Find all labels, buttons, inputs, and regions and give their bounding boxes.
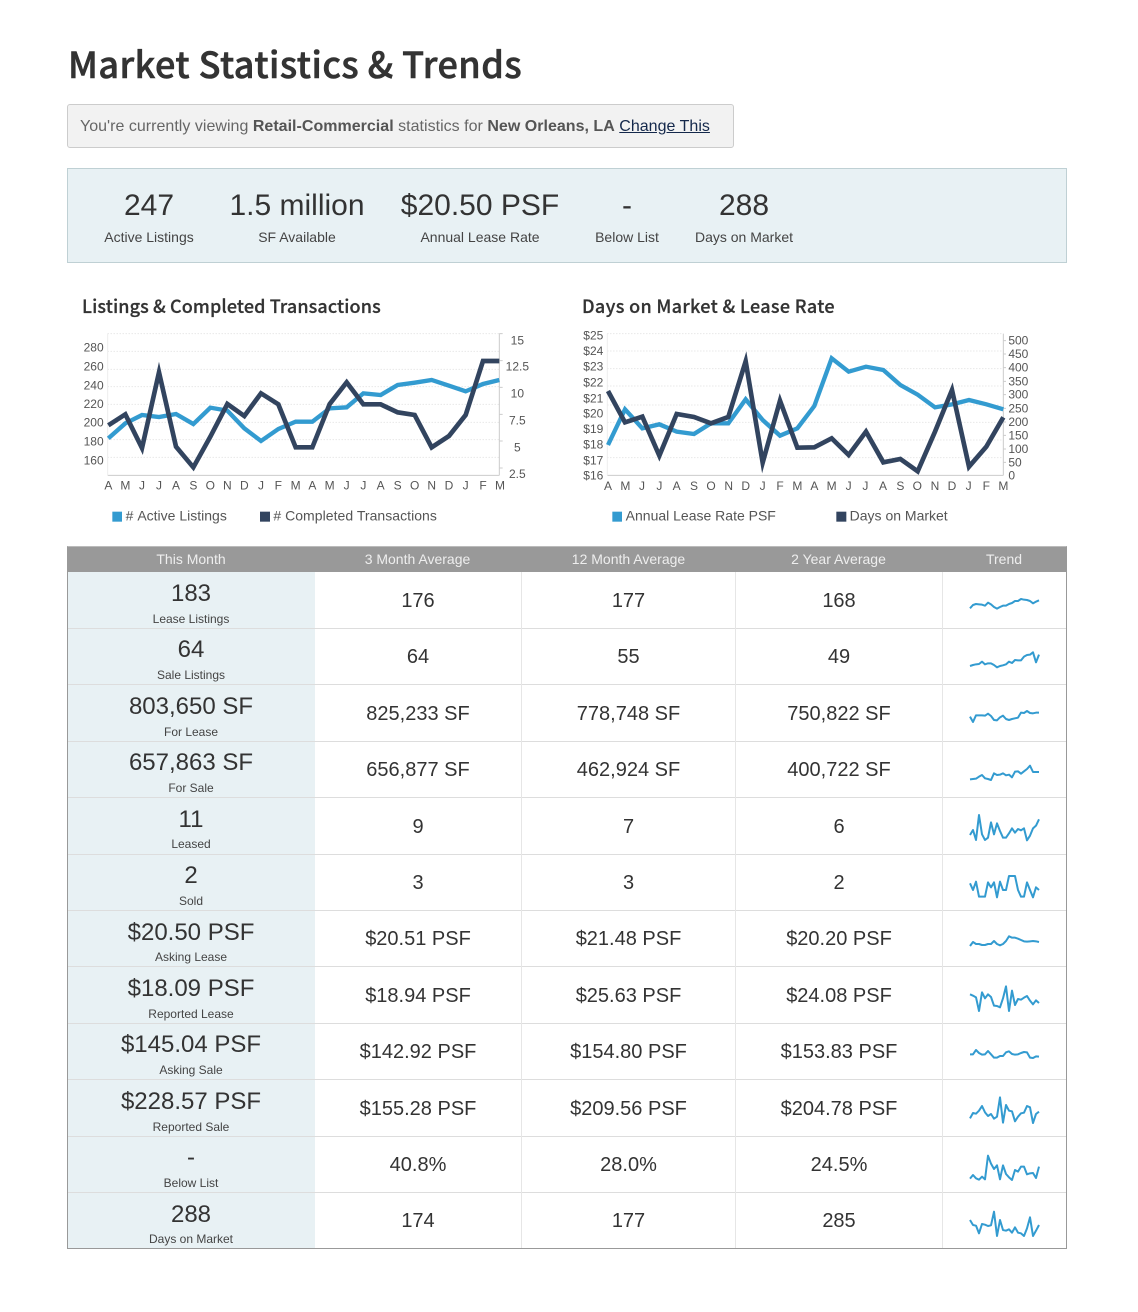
- row: asking sale: $153.83 PSF: [781, 1041, 897, 1063]
- month labels: J: [966, 479, 972, 493]
- row: reported lease: [68, 967, 1066, 1024]
- row: reported lease: $25.63 PSF: [576, 985, 681, 1007]
- sparkline: sold: [970, 876, 1039, 897]
- right axis labels: 450: [1008, 347, 1029, 361]
- row: asking lease: $20.51 PSF: [365, 928, 471, 950]
- stat: days on market: Days on Market: [695, 229, 793, 245]
- sparkline: for lease: [970, 711, 1039, 722]
- row: asking lease: [68, 911, 1066, 967]
- sparkline: below list: [970, 1156, 1039, 1180]
- row: asking lease: Asking Lease: [155, 950, 227, 964]
- left axis labels: 220: [84, 397, 104, 411]
- row: for sale: 656,877 SF: [366, 759, 470, 781]
- row: lease listings: [68, 572, 1066, 629]
- heading: listings chart: Listings & Completed Transactions: [82, 293, 381, 319]
- right axis labels: 400: [1008, 361, 1029, 375]
- row: reported lease: Reported Lease: [148, 1007, 234, 1021]
- row: for sale: 400,722 SF: [787, 759, 891, 781]
- row: asking lease: $20.20 PSF: [786, 928, 892, 950]
- panel: summary statistics band: [67, 168, 1067, 263]
- row: below list: 28.0%: [600, 1154, 657, 1176]
- month labels: A: [604, 479, 612, 493]
- left axis labels: $16: [583, 469, 604, 483]
- row: below list: 24.5%: [811, 1154, 867, 1176]
- row: asking sale: [68, 1024, 1066, 1080]
- row: for sale: 462,924 SF: [577, 759, 680, 781]
- month labels: O: [706, 479, 716, 493]
- month labels: D: [445, 478, 454, 492]
- stat: annual lease rate: [401, 189, 559, 245]
- notice bar: current selection: [67, 104, 734, 148]
- month labels: D: [240, 478, 249, 492]
- month labels: A: [308, 478, 316, 492]
- row: days on market: 285: [822, 1210, 856, 1232]
- row: asking sale: $145.04 PSF: [121, 1031, 261, 1058]
- left axis labels: $17: [583, 453, 604, 467]
- month labels: M: [998, 479, 1008, 493]
- left axis labels: [583, 329, 604, 483]
- row: days on market: 177: [612, 1210, 645, 1232]
- right axis labels: 200: [1008, 415, 1029, 429]
- month labels: A: [810, 479, 818, 493]
- row: sold: 2: [833, 872, 845, 894]
- month labels: N: [931, 479, 939, 493]
- left axis labels: $23: [583, 360, 604, 374]
- month labels: O: [913, 479, 922, 493]
- month labels: M: [325, 478, 335, 492]
- legend: completed transactions: # Completed Transactions: [273, 508, 437, 524]
- sparkline: asking lease: [970, 936, 1039, 946]
- row: reported sale: $155.28 PSF: [360, 1098, 476, 1120]
- stat: days on market: 288: [719, 189, 769, 222]
- row: days on market: Days on Market: [149, 1232, 233, 1246]
- row: leased: 11: [179, 806, 203, 833]
- row: sold: [68, 855, 1066, 911]
- row: lease listings: 183: [171, 580, 211, 607]
- row: sale listings: Sale Listings: [157, 668, 225, 682]
- stat: SF available: 1.5 million: [229, 189, 365, 222]
- row: reported lease: $18.09 PSF: [128, 975, 254, 1002]
- month labels: J: [360, 478, 366, 492]
- line chart: days on market and lease rate: [583, 329, 1029, 524]
- row: for lease: 778,748 SF: [577, 703, 680, 725]
- month labels: A: [104, 478, 112, 492]
- row: below list: -: [187, 1144, 195, 1171]
- month labels: A: [879, 479, 887, 493]
- month labels: M: [620, 479, 630, 493]
- sparkline: lease listings: [970, 599, 1039, 609]
- right axis labels: 15: [511, 333, 524, 347]
- row: leased: 6: [833, 816, 845, 838]
- table header: Trend: [986, 551, 1022, 567]
- row: lease listings: Lease Listings: [153, 612, 229, 626]
- left axis labels: 200: [84, 416, 104, 430]
- month labels: N: [223, 478, 232, 492]
- stat: SF available: SF Available: [258, 229, 336, 245]
- left axis labels: 280: [84, 341, 104, 355]
- month labels: A: [673, 479, 681, 493]
- row: for lease: 825,233 SF: [366, 703, 470, 725]
- row: sale listings: 64: [178, 636, 204, 663]
- sparkline: sale listings: [970, 652, 1039, 667]
- row: below list: Below List: [164, 1176, 218, 1190]
- title: Market Statistics & Trends: [68, 37, 522, 89]
- series: annual lease rate: [608, 358, 1003, 445]
- row: asking lease: $20.50 PSF: [128, 919, 254, 946]
- sparkline: reported sale: [970, 1097, 1039, 1123]
- left axis labels: 260: [84, 359, 104, 373]
- row: days on market: 288: [171, 1201, 211, 1228]
- month labels: S: [394, 478, 402, 492]
- sparkline: reported lease: [970, 986, 1039, 1011]
- right axis labels: 100: [1008, 442, 1029, 456]
- month labels: J: [639, 479, 645, 493]
- row: reported lease: $24.08 PSF: [786, 985, 892, 1007]
- row: sold: 2: [184, 862, 198, 889]
- row: reported sale: $209.56 PSF: [570, 1098, 687, 1120]
- right axis labels: 500: [1008, 334, 1029, 348]
- left axis labels: $20: [583, 406, 604, 420]
- data table: [67, 546, 1067, 1249]
- right axis labels: 7.5: [509, 413, 526, 427]
- month labels: F: [983, 479, 990, 493]
- right axis labels: 10: [511, 387, 524, 401]
- stat: active listings: 247: [124, 189, 174, 222]
- table header: [68, 547, 1066, 572]
- right axis labels: 5: [514, 440, 521, 454]
- right axis labels: 300: [1008, 388, 1029, 402]
- month labels: M: [120, 478, 130, 492]
- month labels: J: [760, 479, 766, 493]
- month labels: D: [948, 479, 957, 493]
- series: active listings: [108, 380, 499, 441]
- table header: 12 Month Average: [572, 551, 685, 567]
- month labels: O: [206, 478, 215, 492]
- left axis labels: $24: [583, 344, 604, 358]
- stat: below list: Below List: [595, 229, 659, 245]
- stat: annual lease rate: $20.50 PSF: [401, 189, 559, 222]
- month labels: J: [156, 478, 162, 492]
- month labels: M: [495, 478, 505, 492]
- trend sparklines column: [969, 598, 1040, 1237]
- month labels: A: [172, 478, 180, 492]
- row: below list: [68, 1137, 1066, 1193]
- month labels: F: [479, 478, 487, 492]
- row: for lease: 803,650 SF: [129, 693, 253, 720]
- left axis labels: $21: [583, 391, 604, 405]
- row: reported sale: [68, 1080, 1066, 1137]
- month labels: J: [139, 478, 145, 492]
- left axis labels: [84, 341, 104, 467]
- left axis labels: 180: [84, 435, 104, 449]
- left axis labels: $18: [583, 437, 604, 451]
- month labels: S: [896, 479, 904, 493]
- series: days on market: [608, 361, 1003, 471]
- sparkline: asking sale: [970, 1050, 1039, 1058]
- stat: below list: [595, 189, 659, 245]
- month labels: F: [776, 479, 784, 493]
- row: for sale: [68, 742, 1066, 798]
- month labels: N: [724, 479, 733, 493]
- row: lease listings: 168: [822, 590, 856, 612]
- row: sold: 3: [623, 872, 634, 894]
- row: lease listings: 176: [401, 590, 435, 612]
- row: leased: [68, 798, 1066, 855]
- row: sale listings: 64: [407, 646, 429, 668]
- stat: annual lease rate: Annual Lease Rate: [420, 229, 540, 245]
- month labels: J: [846, 479, 852, 493]
- left axis labels: 160: [84, 453, 104, 467]
- row: reported sale: $228.57 PSF: [121, 1088, 261, 1115]
- series: completed transactions: [108, 361, 499, 467]
- stat: days on market: [695, 189, 793, 245]
- month labels: M: [291, 478, 301, 492]
- row: days on market: [68, 1193, 856, 1248]
- right axis labels: 350: [1008, 374, 1029, 388]
- row: reported sale: Reported Sale: [153, 1120, 229, 1134]
- right axis labels: 0: [1008, 469, 1015, 483]
- notice bar: current selection: You're currently viewing Retail-Commercial statistics for New Orleans, LA Change This: [80, 118, 710, 135]
- row: leased: 7: [623, 816, 634, 838]
- row: days on market: 174: [401, 1210, 435, 1232]
- left axis labels: $25: [583, 329, 604, 343]
- legend: active listings: # Active Listings: [126, 508, 227, 524]
- month labels: M: [827, 479, 837, 493]
- month labels: S: [189, 478, 197, 492]
- sparkline: days on market: [970, 1212, 1039, 1236]
- legend: annual lease rate: Annual Lease Rate PSF: [626, 508, 776, 524]
- month labels: O: [410, 478, 419, 492]
- right axis labels: 2.5: [509, 467, 526, 481]
- row: asking sale: Asking Sale: [159, 1063, 223, 1077]
- right axis labels: 12.5: [506, 360, 529, 374]
- row: sold: 3: [412, 872, 424, 894]
- row: leased: 9: [412, 816, 424, 838]
- table header: 2 Year Average: [791, 551, 886, 567]
- row: below list: 40.8%: [390, 1154, 446, 1176]
- left axis labels: 240: [84, 378, 104, 392]
- stat: active listings: [104, 189, 194, 245]
- month labels: A: [377, 478, 385, 492]
- right axis labels: [1008, 334, 1029, 483]
- left axis labels: $22: [583, 375, 604, 389]
- row: for sale: 657,863 SF: [129, 749, 253, 776]
- month labels: N: [427, 478, 436, 492]
- row: asking lease: $21.48 PSF: [576, 928, 681, 950]
- row: sale listings: 55: [617, 646, 640, 668]
- row: asking sale: $154.80 PSF: [570, 1041, 687, 1063]
- month labels: M: [792, 479, 802, 493]
- table header: 3 Month Average: [365, 551, 470, 567]
- month labels: S: [690, 479, 698, 493]
- month labels: J: [862, 479, 868, 493]
- heading: days on market chart: Days on Market & Lease Rate: [582, 293, 835, 319]
- month labels: J: [463, 478, 469, 492]
- month labels: D: [741, 479, 750, 493]
- month labels: J: [344, 478, 350, 492]
- stat: SF available: [229, 189, 365, 245]
- month labels: J: [656, 479, 662, 493]
- month labels: [104, 478, 505, 492]
- right axis labels: [506, 333, 529, 481]
- row: for lease: 750,822 SF: [787, 703, 891, 725]
- row: for lease: [68, 685, 1066, 742]
- row: sold: Sold: [179, 894, 203, 908]
- row: reported sale: $204.78 PSF: [781, 1098, 897, 1120]
- stat: below list: -: [622, 189, 632, 222]
- legend: days on market: Days on Market: [850, 508, 948, 524]
- row: sale listings: [68, 629, 1066, 685]
- month labels: J: [258, 478, 264, 492]
- row: for lease: For Lease: [164, 725, 218, 739]
- sparkline: leased: [970, 815, 1039, 840]
- table header: This Month: [156, 551, 226, 567]
- row: lease listings: 177: [612, 590, 645, 612]
- row: reported lease: $18.94 PSF: [365, 985, 471, 1007]
- row: sale listings: 49: [828, 646, 850, 668]
- right axis labels: 50: [1008, 455, 1022, 469]
- month labels: F: [275, 478, 282, 492]
- stat: active listings: Active Listings: [104, 229, 194, 245]
- right axis labels: 150: [1008, 428, 1029, 442]
- left axis labels: $19: [583, 422, 604, 436]
- row: asking sale: $142.92 PSF: [360, 1041, 476, 1063]
- line chart: listings and completed transactions: [84, 333, 529, 524]
- row: leased: Leased: [171, 837, 211, 851]
- month labels: [604, 479, 1008, 493]
- row: for sale: For Sale: [168, 781, 214, 795]
- right axis labels: 250: [1008, 401, 1029, 415]
- sparkline: for sale: [970, 766, 1039, 780]
